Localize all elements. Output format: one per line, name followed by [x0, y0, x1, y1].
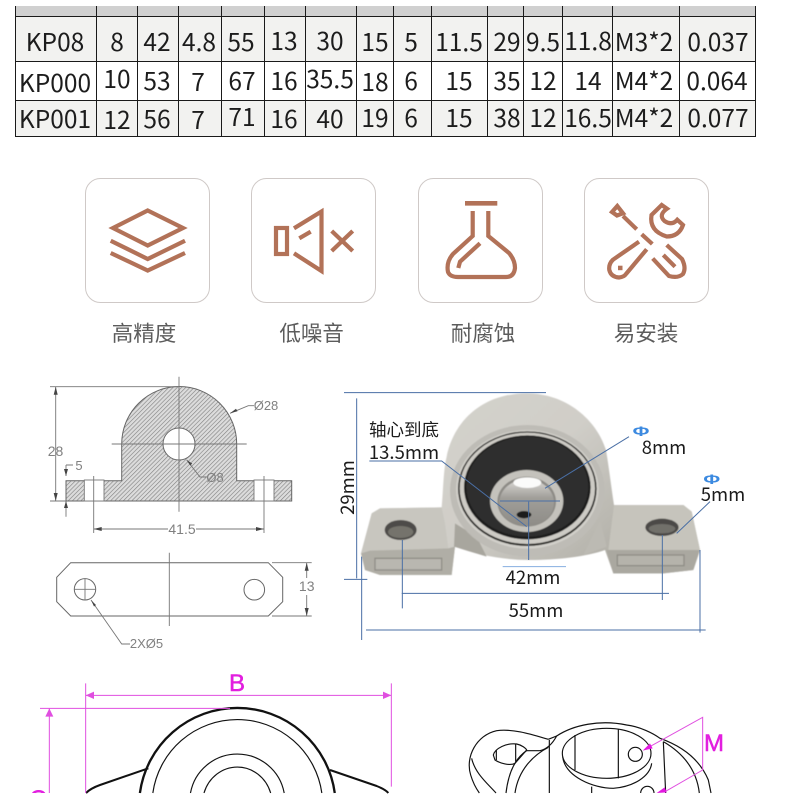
product photo: pillow block bearing with dimensions: 轴心到底: [369, 417, 439, 442]
feature: corrosion resistant: [418, 178, 542, 348]
table: bearing dimensions: 13: [270, 23, 298, 58]
product photo: pillow block bearing with dimensions: Φ: [633, 423, 649, 439]
feature: high precision: [86, 178, 210, 348]
feature: easy installation: 易安装: [614, 317, 678, 348]
product photo: pillow block bearing with dimensions: 42mm: [506, 564, 560, 590]
table: bearing dimensions: 11.5: [435, 24, 483, 59]
table: bearing dimensions: 16.5: [564, 100, 612, 135]
table: bearing dimensions: 12: [529, 100, 557, 135]
technical drawing: base plate: [57, 553, 315, 651]
technical drawing: side view: 41.5: [168, 521, 196, 537]
table: bearing dimensions: 35: [493, 63, 521, 98]
table: bearing dimensions: M3*2: [615, 24, 673, 59]
product photo: pillow block bearing with dimensions: 55mm: [509, 597, 563, 623]
table: bearing dimensions: M4*2: [615, 100, 673, 135]
product photo: pillow block bearing with dimensions: 5mm: [701, 481, 745, 507]
table: bearing dimensions: 16: [270, 101, 298, 136]
technical drawing: side view: 5: [75, 458, 83, 473]
table: bearing dimensions: 16: [270, 63, 298, 98]
feature: easy installation: [584, 178, 708, 348]
table: bearing dimensions: 12: [529, 63, 557, 98]
feature: corrosion resistant: 耐腐蚀: [451, 317, 515, 348]
table: bearing dimensions: 0.064: [686, 63, 748, 98]
table: bearing dimensions: 15: [445, 100, 473, 135]
product photo: pillow block bearing with dimensions: [334, 393, 745, 640]
table: bearing dimensions: KP001: [19, 101, 91, 136]
line drawing: front view with dimensions B and C: [29, 670, 391, 800]
table: bearing dimensions: 29: [493, 24, 521, 59]
table: bearing dimensions: 42: [143, 24, 171, 59]
line drawing: perspective view with dimension M: M: [704, 730, 724, 757]
technical drawing: side view: 28: [48, 443, 63, 459]
line drawing: front view with dimensions B and C: B: [229, 670, 245, 697]
product photo: pillow block bearing with dimensions: 29mm: [334, 460, 360, 515]
table: bearing dimensions: 5: [404, 24, 418, 59]
technical drawing: base plate: 13: [299, 578, 315, 594]
feature: low noise: [252, 178, 376, 348]
table: bearing dimensions: 12: [103, 102, 131, 137]
table: bearing dimensions: 15: [361, 24, 389, 59]
table: bearing dimensions: 9.5: [526, 24, 560, 59]
table: bearing dimensions: 40: [316, 101, 344, 136]
feature: high precision: 高精度: [112, 317, 176, 348]
table: bearing dimensions: 35.5: [306, 61, 354, 96]
line drawing: perspective view with dimension M: [469, 717, 724, 793]
technical drawing: base plate: 2XØ5: [130, 636, 163, 651]
table: bearing dimensions: M4*2: [615, 63, 673, 98]
table: bearing dimensions: 55: [227, 24, 255, 59]
table: bearing dimensions: [15, 6, 756, 137]
table: bearing dimensions: 53: [143, 63, 171, 98]
technical drawing: side view: [48, 377, 292, 537]
table: bearing dimensions: 7: [191, 102, 205, 137]
product photo: pillow block bearing with dimensions: 8mm: [642, 434, 686, 460]
technical drawing: side view: Ø28: [254, 398, 278, 413]
icon: layers: [111, 210, 185, 270]
table: bearing dimensions: KP000: [19, 65, 91, 100]
table: bearing dimensions: 67: [228, 63, 256, 98]
product photo: pillow block bearing with dimensions: 13.5mm: [369, 439, 439, 465]
table: bearing dimensions: 38: [493, 100, 521, 135]
table: bearing dimensions: 0.077: [687, 100, 749, 135]
table: bearing dimensions: KP08: [26, 24, 84, 59]
product photo: pillow block bearing with dimensions: Φ: [703, 471, 720, 487]
table: bearing dimensions: 56: [143, 101, 171, 136]
icon: muted speaker: [276, 212, 353, 271]
table: bearing dimensions: 8: [110, 24, 124, 59]
icon: flask: [448, 203, 515, 277]
table: bearing dimensions: 19: [361, 100, 389, 135]
table: bearing dimensions: 6: [404, 63, 418, 98]
table: bearing dimensions: 30: [316, 23, 344, 58]
table: bearing dimensions: 7: [191, 64, 205, 99]
table: bearing dimensions: 4.8: [182, 24, 216, 59]
table: bearing dimensions: 18: [361, 64, 389, 99]
table: bearing dimensions: 0.037: [687, 24, 749, 59]
table: bearing dimensions: 10: [103, 61, 131, 96]
table: bearing dimensions: 11.8: [564, 23, 612, 58]
icon: crossed tools: [609, 205, 685, 278]
feature: low noise: 低噪音: [279, 317, 344, 348]
table: bearing dimensions: 6: [404, 100, 418, 135]
table: bearing dimensions: 71: [228, 99, 256, 134]
table: bearing dimensions: 15: [445, 63, 473, 98]
technical drawing: side view: Ø8: [206, 470, 224, 485]
table: bearing dimensions: 14: [574, 63, 602, 98]
